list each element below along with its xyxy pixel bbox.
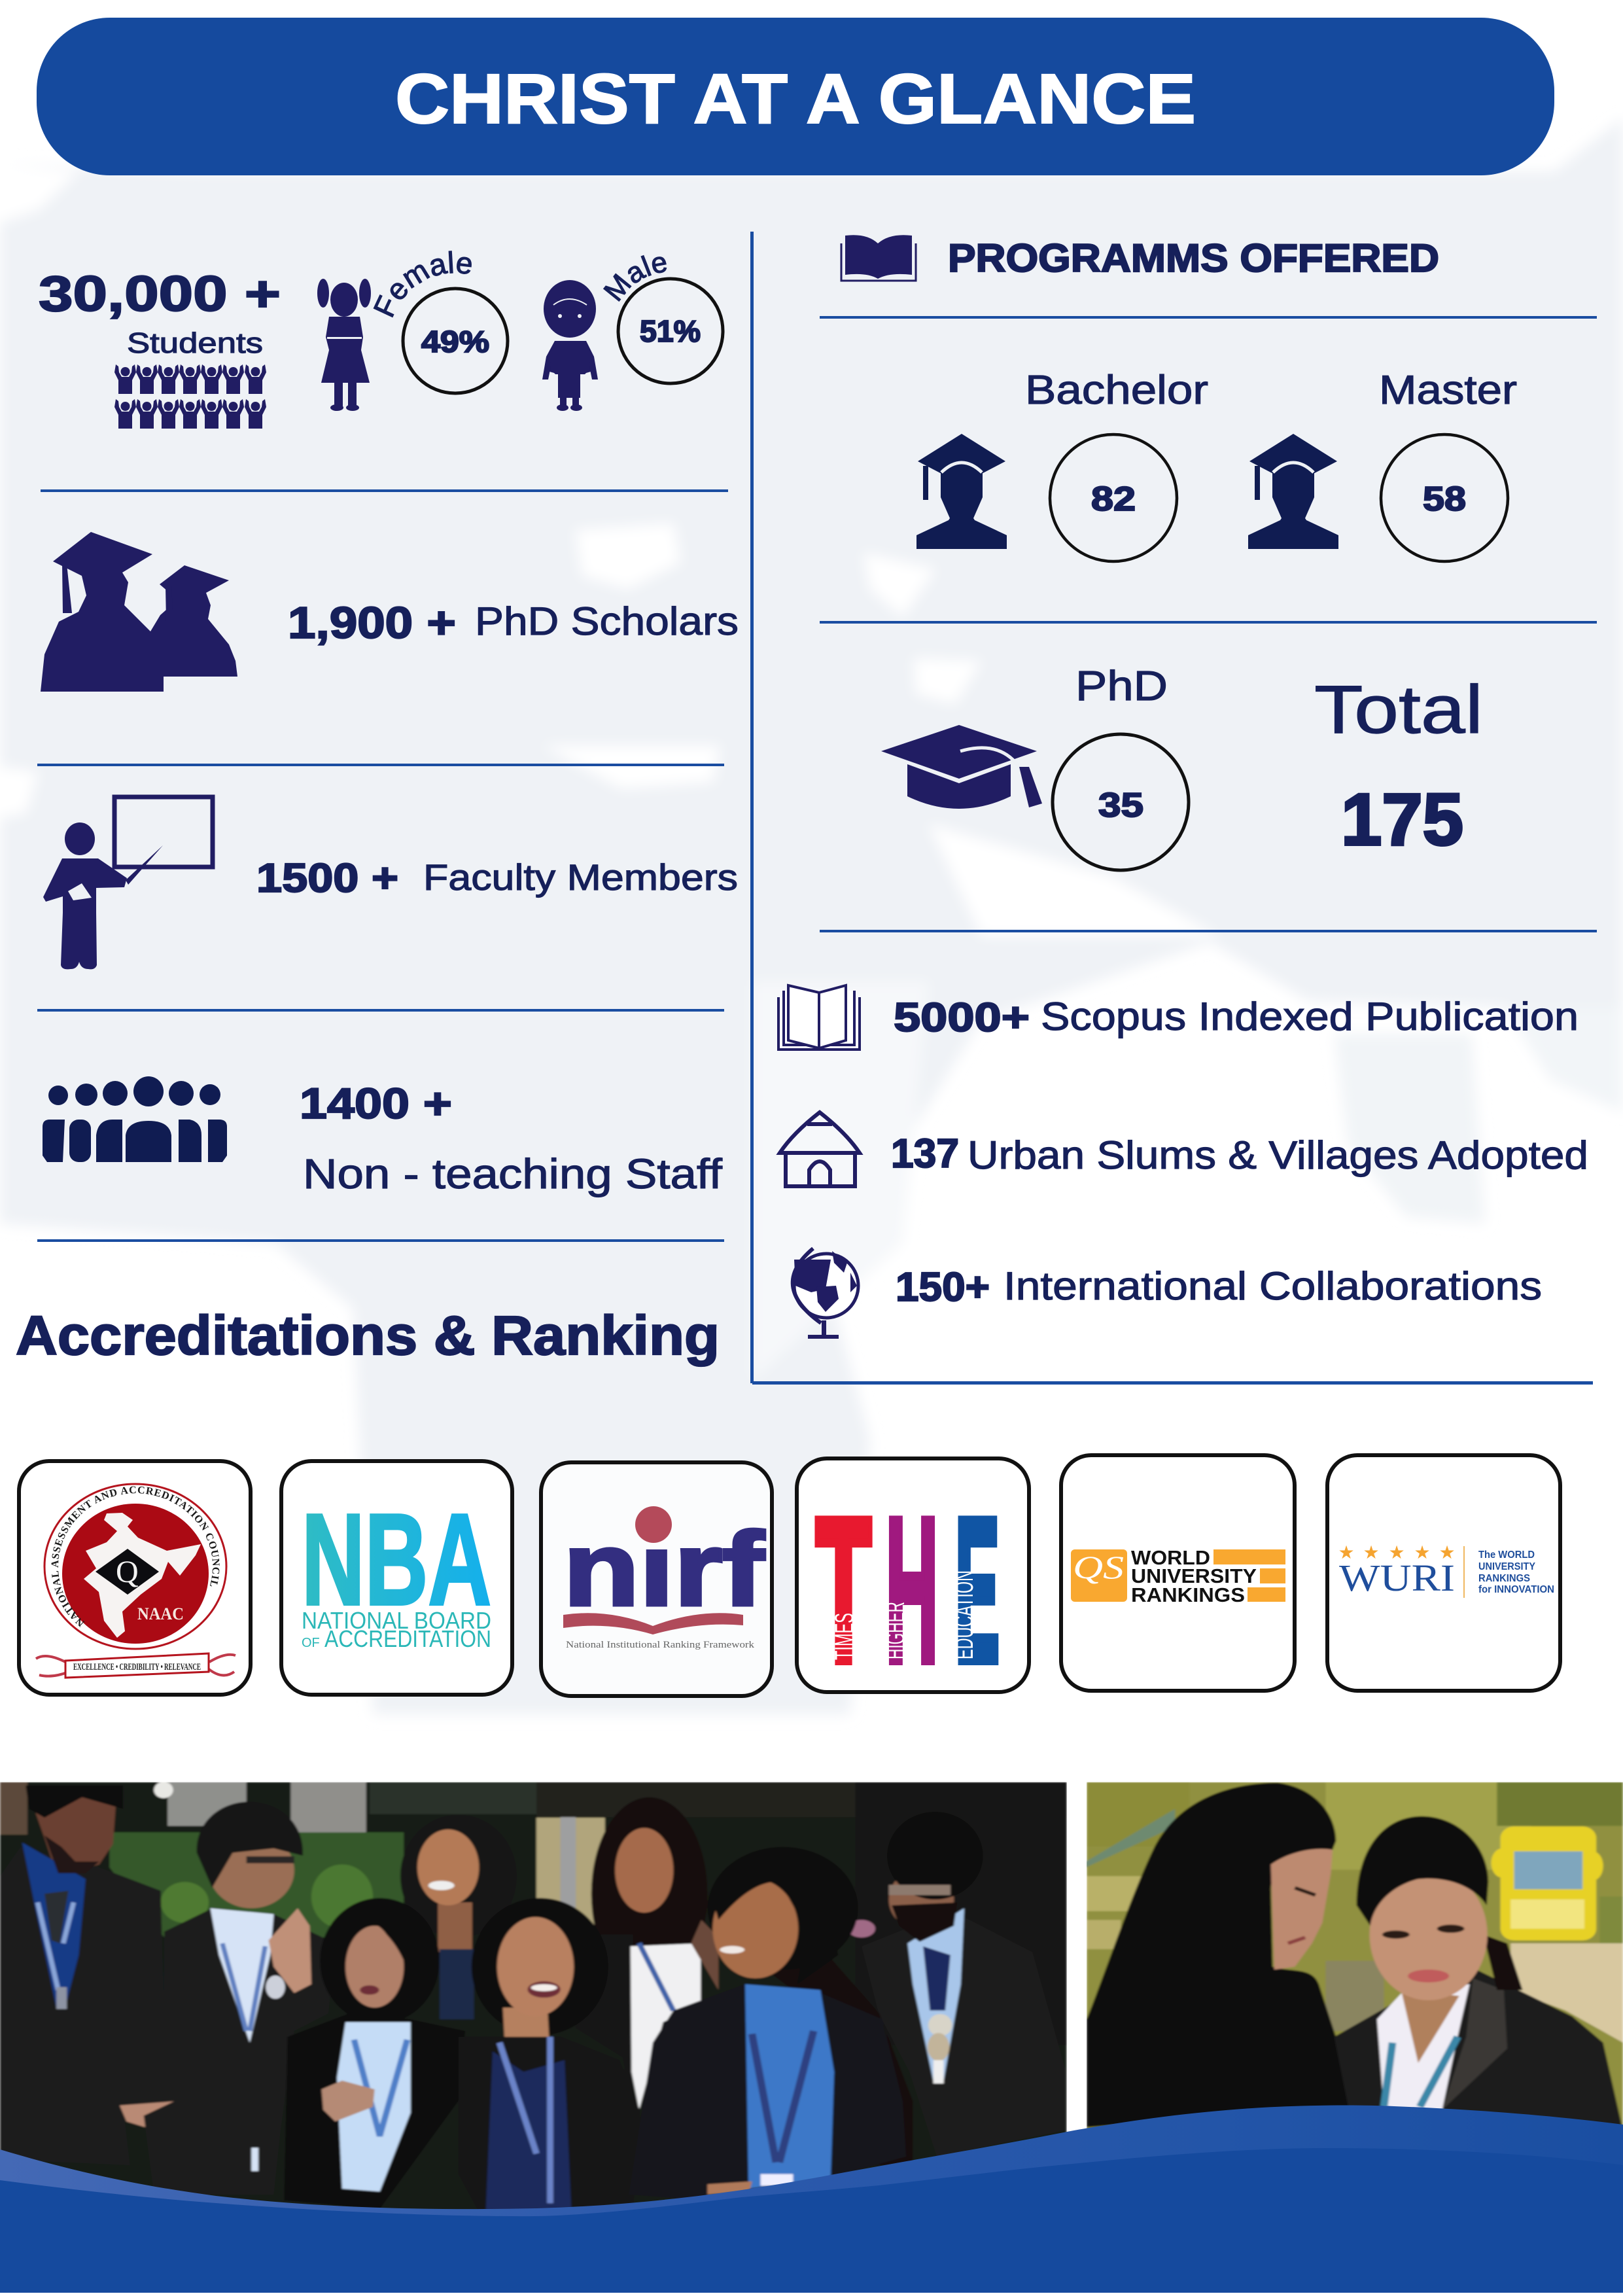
icon: cheering crowd [114, 364, 266, 429]
icon: master graduate [1248, 434, 1338, 549]
icon: boy [542, 280, 598, 411]
male percentage: 51% [640, 314, 701, 348]
logo: THE: E [955, 1477, 1000, 1704]
icon: open book [841, 235, 916, 281]
publications count: 5000+ [894, 995, 1030, 1040]
logo: NBA: NBA [302, 1487, 491, 1633]
male label [618, 272, 677, 304]
icon: teacher at board [43, 797, 213, 969]
logo: NAAC: EXCELLENCE • CREDIBILITY • RELEVANCE [73, 1662, 201, 1672]
icon: globe [793, 1248, 858, 1339]
logo: NAAC: NATIONAL ASSESSMENT AND ACCREDITATION COUNCIL [51, 1487, 220, 1627]
icon: bachelor graduate [916, 434, 1007, 549]
villages count: 137 [891, 1131, 959, 1176]
panel: programmes offered [841, 235, 1517, 870]
logo: WURI: ★ [1363, 1542, 1380, 1563]
logo: WURI: ★ [1414, 1542, 1431, 1563]
phd programme label: PhD [1075, 662, 1168, 709]
collaborations label: International Collaborations [1003, 1264, 1542, 1308]
phd count: 1,900 + [288, 598, 456, 648]
logo: WURI: ★ [1338, 1542, 1355, 1563]
total count: 175 [1341, 779, 1463, 860]
panel: phd scholars [41, 532, 739, 692]
logo: NBA: ACCREDITATION [324, 1625, 491, 1652]
panel: students: Female [373, 251, 472, 318]
icon: mortarboard [881, 725, 1042, 809]
logo: THE: H [886, 1477, 938, 1704]
icon: group of people [43, 1076, 227, 1162]
photo: two students [1086, 1782, 1623, 2162]
logo: NBA: NATIONAL BOARD [302, 1607, 491, 1634]
logo: NBA [281, 1461, 512, 1695]
staff label: Non - teaching Staff [303, 1150, 722, 1197]
icon: graduates silhouette [41, 532, 237, 692]
logo: NIRF: nirf [563, 1510, 765, 1627]
logo: WURI: The WORLD [1478, 1549, 1535, 1561]
icon: hut [780, 1112, 860, 1186]
female percentage: 49% [421, 325, 489, 359]
logo: WURI: WURI [1339, 1557, 1455, 1599]
panel: non-teaching staff [43, 1076, 722, 1197]
column dividers [37, 232, 1597, 1385]
master label: Master [1379, 368, 1517, 413]
logo: THE: T [816, 1477, 871, 1704]
photo: students walking [0, 1782, 1067, 2220]
logo: THE: HIGHER [881, 1602, 910, 1659]
logo: QS: WORLD [1131, 1546, 1210, 1569]
villages label: Urban Slums & Villages Adopted [968, 1133, 1588, 1177]
panel: impact stats [778, 985, 1588, 1339]
total label: Total [1314, 672, 1483, 748]
phd circle [1053, 734, 1189, 870]
master count: 58 [1423, 480, 1466, 518]
female label [390, 273, 497, 329]
icon: outlined book [778, 985, 860, 1050]
icon: girl [317, 279, 371, 411]
publications label: Scopus Indexed Publication [1041, 995, 1579, 1038]
students label: Students [127, 327, 263, 359]
logo: THE: TIMES [830, 1613, 859, 1660]
logo: THE [797, 1458, 1029, 1704]
title banner [37, 18, 1554, 175]
logo: QS: QS [1073, 1549, 1124, 1585]
logo: NIRF: National Institutional Ranking Framework [566, 1640, 755, 1650]
logo: WURI: ★ [1388, 1542, 1405, 1563]
bottom wave: main layer [0, 2148, 1623, 2293]
logo: QS [1061, 1455, 1295, 1691]
male circle [618, 279, 723, 383]
panel: faculty [43, 797, 738, 969]
logo: QS: UNIVERSITY [1131, 1564, 1257, 1587]
bachelor circle [1050, 434, 1177, 561]
logo: NAAC: Q [116, 1555, 139, 1589]
logo: NBA: OF [302, 1636, 320, 1650]
phd count: 35 [1098, 786, 1143, 824]
staff count: 1400 + [300, 1079, 452, 1127]
collaborations count: 150+ [896, 1265, 990, 1310]
logo: WURI: ★ [1439, 1542, 1456, 1563]
bottom wave: light layer [0, 2106, 1623, 2293]
logo: WURI: RANKINGS [1478, 1573, 1530, 1584]
panel: students: Male [603, 255, 667, 302]
bachelor count: 82 [1091, 480, 1136, 518]
logo: NIRF [541, 1462, 772, 1696]
logo: THE: EDUCATION [950, 1570, 979, 1659]
faculty label: Faculty Members [423, 857, 738, 898]
logo: WURI: UNIVERSITY [1478, 1561, 1535, 1572]
logo: WURI [1327, 1455, 1560, 1691]
female circle [403, 289, 508, 393]
logo: NAAC [17, 1459, 253, 1697]
programmes heading: PROGRAMMS OFFERED [948, 236, 1439, 280]
bachelor label: Bachelor [1025, 368, 1208, 413]
logo: QS: RANKINGS [1131, 1583, 1245, 1606]
master circle [1381, 434, 1508, 561]
logo: NAAC: NAAC [137, 1604, 184, 1623]
phd label: PhD Scholars [475, 599, 739, 643]
faculty count: 1500 + [256, 856, 398, 901]
logo: WURI: for INNOVATION [1478, 1584, 1554, 1595]
heading: accreditations: Accreditations & Ranking [16, 1305, 720, 1366]
background figure details [848, 1920, 875, 1937]
title banner: CHRIST AT A GLANCE [395, 59, 1196, 138]
panel: students [39, 251, 725, 429]
students count: 30,000 + [39, 266, 281, 322]
